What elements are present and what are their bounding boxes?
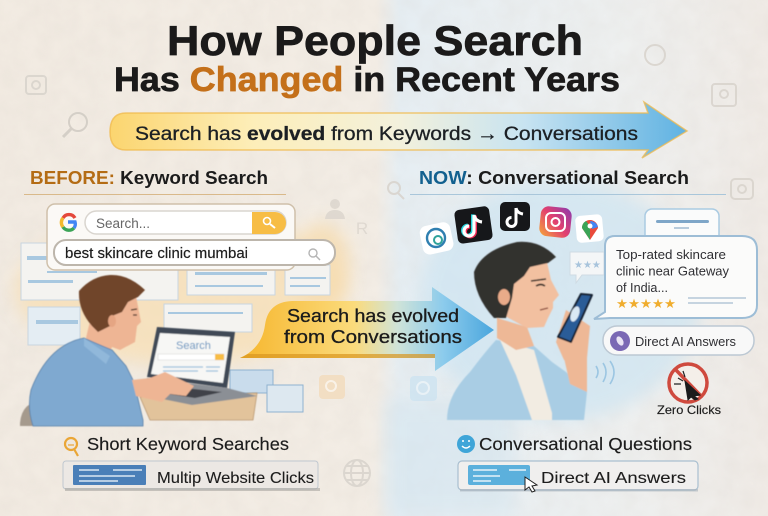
hair — [79, 275, 145, 332]
middle arrow: Search has evolved — [287, 306, 459, 326]
neck and face — [86, 296, 141, 356]
small card — [645, 209, 719, 249]
icon: faint magnifier right — [388, 182, 404, 199]
laptop — [138, 327, 257, 405]
icon: faint magnifier — [63, 113, 87, 137]
answer bubble: ★★★★★ — [616, 296, 676, 311]
icon: tiktok right — [500, 202, 530, 231]
heading: now: NOW: Conversational Search — [419, 168, 689, 188]
face — [505, 262, 559, 328]
icon: tiktok left — [454, 206, 493, 244]
arm — [132, 372, 194, 402]
phone — [558, 294, 592, 342]
desk — [140, 393, 257, 420]
icon: globe — [344, 460, 370, 486]
search box card — [47, 204, 335, 270]
icon: maps pin — [575, 214, 604, 243]
icon: faint camera top-left — [26, 76, 46, 94]
icon: faint circle top-right — [645, 45, 665, 65]
star chat bubble — [570, 252, 604, 283]
laptop: Search — [176, 340, 211, 352]
shirt — [500, 340, 552, 420]
background result windows — [21, 243, 330, 412]
hair — [474, 242, 556, 318]
icon: faint camera left — [410, 376, 437, 401]
top banner arrow — [110, 102, 687, 158]
icon: instagram — [539, 206, 572, 239]
chip: direct answers — [458, 461, 698, 492]
caption: before: Short Keyword Searches — [87, 434, 289, 454]
chip: direct answers: Direct AI Answers — [541, 470, 686, 487]
answer bubble: Top-rated skincare — [616, 247, 726, 262]
middle arrow: from Conversations — [284, 327, 462, 347]
icon: faint person — [325, 199, 345, 219]
arm — [564, 358, 587, 392]
neck — [497, 318, 534, 350]
title — [114, 17, 620, 99]
search input — [85, 211, 286, 234]
chat cards — [570, 209, 757, 417]
icon: wifi waves — [596, 361, 614, 384]
top banner arrow: Search has evolved from Keywords → Conversations — [135, 123, 638, 145]
icon: chat smile — [457, 435, 475, 453]
title: How People Search — [167, 17, 583, 64]
torso — [29, 338, 143, 426]
illustration: man with phone — [447, 242, 592, 420]
keyword input: best skincare clinic mumbai — [65, 246, 248, 262]
torso — [447, 340, 587, 420]
collar — [84, 338, 110, 364]
answer bubble: of India... — [616, 280, 668, 295]
app icons — [418, 202, 604, 256]
title: Has Changed in Recent Years — [114, 61, 620, 99]
heading: before: BEFORE: Keyword Search — [30, 168, 268, 188]
zero clicks: Zero Clicks — [657, 403, 721, 417]
icon: faint rupee: R — [356, 219, 368, 238]
eye and brow — [131, 309, 137, 315]
caption: now — [457, 434, 698, 492]
chip: multiple clicks — [63, 461, 320, 491]
answer bubble: clinic near Gateway — [616, 264, 729, 278]
chip: multiple clicks: Multip Website Clicks — [157, 470, 314, 487]
answer bubble — [594, 236, 757, 319]
icon: google G — [61, 215, 75, 230]
direct ai answers pill: Direct AI Answers — [635, 334, 736, 349]
icon: faint tile magnifier — [319, 375, 345, 399]
hand — [556, 310, 590, 360]
eye and brow — [531, 279, 546, 286]
illustration: man at laptop — [20, 275, 257, 426]
caption: now: Conversational Questions — [479, 434, 692, 454]
search input: Search... — [96, 216, 150, 231]
direct ai answers pill — [603, 326, 754, 355]
middle arrow — [240, 287, 494, 371]
icon: faint tile top-right — [712, 84, 736, 106]
star chat bubble: ★★★ — [574, 260, 601, 271]
chair — [20, 401, 78, 426]
icon: ai chat app — [418, 221, 455, 256]
icon: orange magnifier — [65, 438, 78, 456]
icon: faint top-right — [731, 179, 753, 199]
keyword input — [54, 240, 335, 265]
ear — [498, 289, 510, 305]
smile — [540, 308, 548, 310]
caption: before — [63, 434, 320, 491]
ear — [108, 315, 116, 327]
zero clicks — [657, 364, 721, 417]
